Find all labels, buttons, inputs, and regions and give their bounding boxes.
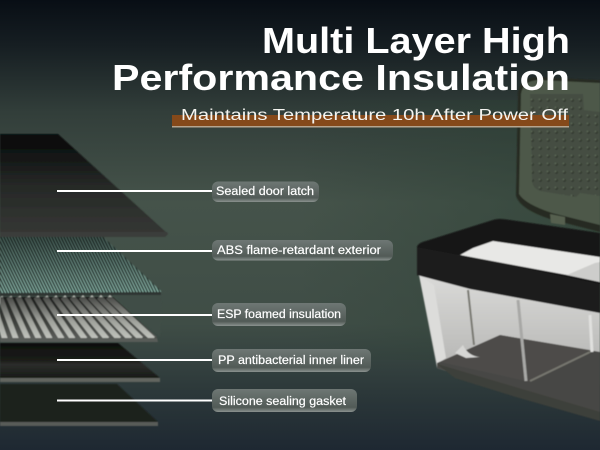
layer stack: [0, 134, 168, 426]
layer 5: silicone gasket: [0, 384, 158, 426]
clear body: [418, 270, 600, 421]
label: ABS flame-retardant exterior: [212, 240, 393, 260]
lid: [516, 77, 600, 232]
layer 3: ESP foam: [0, 295, 162, 342]
layer 2: ABS exterior: [0, 237, 161, 296]
label: sealed door latch: Sealed door latch: [216, 186, 314, 198]
subtitle with highlight bar: [172, 107, 569, 128]
label: silicone sealing gasket: [212, 389, 357, 412]
layer 1: sealed door latch: [0, 134, 168, 237]
leader lines: [57, 190, 213, 402]
subtitle with highlight bar: Maintains Temperature 10h After Power Off: [181, 107, 569, 124]
label: PP antibacterial inner liner: PP antibacterial inner liner: [218, 355, 364, 367]
title: [112, 20, 570, 98]
rim: [417, 214, 600, 313]
label: ESP foamed insulation: ESP foamed insulation: [217, 309, 341, 321]
label: ABS flame-retardant exterior: ABS flame-retardant exterior: [217, 245, 381, 257]
cooler box: [417, 77, 600, 421]
label: PP antibacterial inner liner: [212, 349, 371, 372]
title: Multi Layer High: [262, 20, 570, 61]
layer 4: PP liner: [0, 343, 160, 382]
label: ESP foamed insulation: [212, 303, 346, 326]
title: Performance Insulation: [112, 57, 570, 98]
label: sealed door latch: [212, 182, 319, 202]
label: silicone sealing gasket: Silicone sealing gasket: [219, 396, 347, 408]
